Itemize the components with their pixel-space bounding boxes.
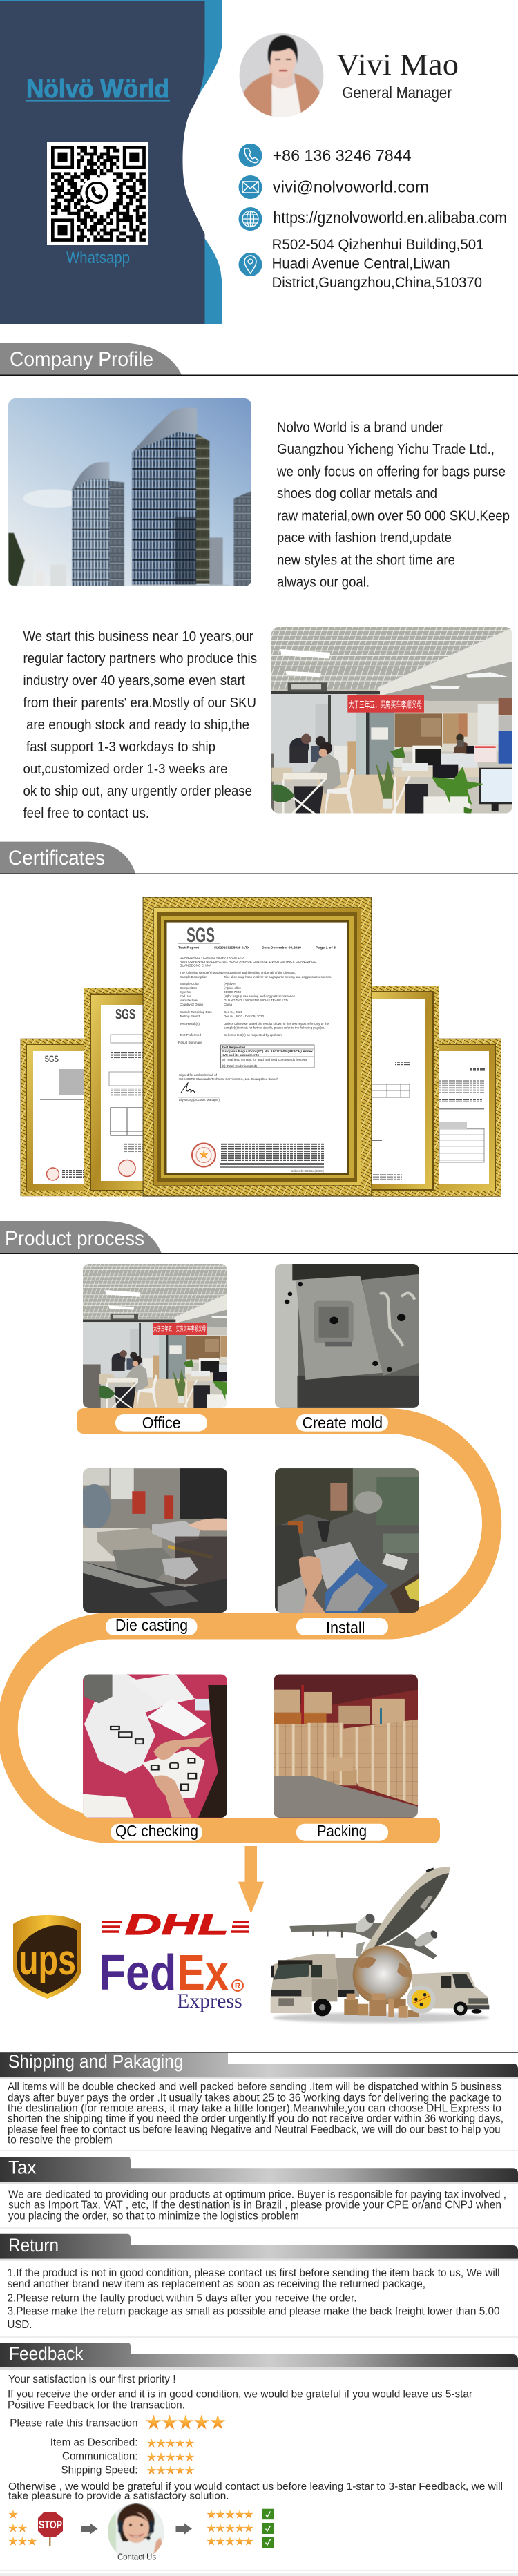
certificate: inner left <box>84 988 156 1196</box>
rating: overall transaction <box>10 2414 225 2430</box>
rating: shipping speed <box>61 2465 194 2477</box>
parcels <box>344 1994 419 2018</box>
body text <box>8 2189 506 2222</box>
plane <box>289 1867 450 1959</box>
rating: item as described <box>50 2437 194 2449</box>
feedback intro text: If you receive the order and it is in good condition, we would be grateful if you would leave us 5-star <box>8 2389 472 2401</box>
certificate: center SGS test report: Country of Origin <box>180 1003 203 1006</box>
contact row: email <box>239 175 429 199</box>
certificate: center SGS test report: Signed for and on behalf of <box>179 1073 218 1077</box>
certificate: center SGS test report: Dec 04, 2020 - Dec 09, 2020 <box>224 1015 264 1018</box>
five-star result rows <box>207 2510 253 2546</box>
van <box>411 1972 489 2015</box>
certificate: center SGS test report: Dec 04, 2020 <box>224 1010 242 1014</box>
icon: stop sign: STOP <box>39 2519 62 2531</box>
certificate: center SGS test report: Style No. <box>180 990 191 994</box>
text block: business history: are enough stock and ready to ship,the <box>26 718 249 733</box>
body text: shorten the shipping time if you need the order urgently.If you do not receive order within 36 working days, <box>8 2113 503 2125</box>
text block: business history: feel free to contact us. <box>23 806 149 821</box>
certificate: center SGS test report: European Regulation (EC) No. 1907/2006 (REACH) Annex <box>222 1050 313 1053</box>
feedback request text <box>8 2481 503 2501</box>
certificate: center SGS test report: GUANGZHOU YICHENG YICHU TRADE LTD. <box>180 956 244 959</box>
text block: company intro: pace with fashion trend,update <box>277 530 452 546</box>
text block: company intro: always our goal. <box>277 575 370 590</box>
truck <box>271 1954 359 2016</box>
label: Office: Office <box>142 1414 181 1432</box>
certificate: center SGS test report: 00090-7003 <box>224 990 241 994</box>
certificate: center SGS test report: Composition <box>180 986 197 990</box>
body text: to resolve the problem <box>8 2134 113 2146</box>
heading bar <box>0 2343 518 2370</box>
QR code: Whatsapp <box>47 142 148 245</box>
logo: Nolvo World: Nölvö Wörld <box>26 75 169 103</box>
label: Install <box>296 1618 388 1637</box>
photo: warehouse <box>274 1673 418 1818</box>
text block: business history: out,customized order 1-3 weeks are <box>23 762 228 777</box>
contact row: address <box>239 237 484 291</box>
certificate: center SGS test report: GUANGDONG CHINA <box>180 964 212 967</box>
heading bar <box>0 2234 518 2261</box>
photo: die casting <box>77 1468 227 1613</box>
photo: QC checking <box>83 1673 227 1818</box>
certificate: far left: SGS <box>45 1053 59 1064</box>
certificate: inner right <box>359 986 439 1196</box>
rating: overall transaction: Please rate this transaction <box>10 2418 137 2430</box>
certificate: center SGS test report <box>143 897 372 1197</box>
contact row: address: Huadi Avenue Central,Liwan <box>272 256 450 272</box>
icon: envelope <box>239 175 262 199</box>
body text: you placing the order, so that to minimize the logistics problem <box>8 2210 299 2222</box>
photo: office towers <box>7 397 253 588</box>
portrait photo: Vivi Mao <box>238 32 325 119</box>
certificate: center SGS test report: Unless otherwise stated the results shown in this test report refer only to the <box>224 1022 329 1026</box>
step 1: Office <box>83 1264 227 1432</box>
logo: FedEx Express: Ex <box>177 1945 229 2001</box>
body text: We are dedicated to providing our products at optimum price. Buyer is responsible for paying tax involved , <box>8 2189 506 2200</box>
certificate: far right <box>373 1039 501 1197</box>
logo: FedEx Express: Fed <box>99 1945 177 2001</box>
feedback intro text <box>8 2374 472 2412</box>
certificate: center SGS test report: SGS <box>186 924 215 947</box>
certificate: center SGS test report: GUANGZHOU YICHENG YICHU TRADE LTD. <box>224 999 289 1002</box>
certificate: center SGS test report: Zinc alloy snap hook in silver for bags purse sewing and dog pets accessories. <box>224 975 332 979</box>
label: Die casting: Die casting <box>115 1616 188 1634</box>
label: QC checking: QC checking <box>115 1822 198 1840</box>
heading bar <box>0 2157 518 2184</box>
arrow: process to shipping <box>238 1846 264 1914</box>
certificate: center SGS test report: (A)for bags purse sewing and dog pets accessories <box>224 994 296 998</box>
section: Return <box>0 2228 518 2331</box>
photo: office interior: 大于三年五，买房买车孝顺父母 <box>349 699 422 710</box>
stopwatch <box>407 1985 436 2014</box>
body text: 1.If the product is not in good condition, please contact us first before sending the item back to us, We will <box>7 2267 500 2279</box>
photo: customer service agent <box>108 2503 164 2562</box>
logo: DHL: DHL <box>125 1908 229 1941</box>
label: Install: Install <box>326 1619 365 1637</box>
label: Packing: Packing <box>317 1822 367 1840</box>
certificate: center SGS test report: R504 QIZHENHUI BUILDING, 501 HUADI AVENUE CENTRAL, LIWAN DISTRICT, GUANGZHOU, <box>180 960 317 963</box>
certificate: center SGS test report: Member of the SGS Group (SGS SA) <box>291 1169 324 1173</box>
heading: Product process: Product process <box>5 1227 144 1250</box>
heading bar: Shipping and Pakaging <box>8 2051 184 2072</box>
icon: location pin <box>239 253 262 276</box>
text block: business history: We start this business near 10 years,our <box>23 629 253 644</box>
certificate: center SGS test report: (A)zinc alloy <box>224 986 242 990</box>
text block: business history <box>23 629 257 821</box>
photo: mold <box>275 1264 419 1408</box>
text block: company intro: we only focus on offering for bags purse <box>276 464 506 479</box>
text block: company intro: Nolvo World is a brand under <box>277 420 443 435</box>
logo: FedEx Express: Express <box>177 1990 242 2012</box>
Whatsapp label: Whatsapp <box>66 249 130 267</box>
logo: UPS <box>13 1915 81 1999</box>
icon: phone <box>239 144 262 167</box>
certificate: center SGS test report: XVII and its amendments <box>222 1053 259 1057</box>
body text: please feel free to contact us before leaving Negative and Neutral Feedback, we will do our best to help you <box>8 2124 501 2135</box>
contact row: phone <box>239 144 412 167</box>
certificate: center SGS test report: Sample Color <box>180 982 199 986</box>
heading: Product process <box>0 1221 518 1254</box>
certificate: center SGS test report: Selected test(s) as requested by applicant <box>224 1033 283 1037</box>
label: Packing <box>296 1822 388 1841</box>
rating: communication <box>62 2451 194 2463</box>
section: Feedback <box>0 2337 518 2562</box>
certificate: center SGS test report: a) Total lead content for lead and lead compounds (except <box>222 1058 307 1061</box>
certificate: center SGS test report: Sample Description <box>180 975 207 979</box>
body text: 3.Please make the return package as small as possible and please make the back freight lower than 5.00 <box>7 2306 500 2318</box>
icon: green check boxes <box>262 2509 274 2548</box>
body text: send another brand new item as replacement as soon as receiving the returned package, <box>7 2278 425 2290</box>
globe <box>353 1945 412 2005</box>
feedback intro text: Your satisfaction is our first priority ! <box>8 2374 175 2385</box>
low star ratings <box>8 2510 37 2546</box>
card dark navy panel <box>0 1 204 324</box>
text block: business history: fast support 1-3 workdays to ship <box>26 740 215 755</box>
photo: office interior <box>271 627 512 814</box>
arrow: to five stars <box>175 2523 192 2535</box>
certificate: center SGS test report: Test Report <box>178 946 200 949</box>
section: Shipping and Pakaging <box>0 2051 518 2146</box>
text block: company intro: Guangzhou Yicheng Yichu Trade Ltd., <box>277 442 495 457</box>
contact row: address: R502-504 Qizhenhui Building,501 <box>272 237 484 253</box>
certificate: center SGS test report: China <box>224 1003 232 1006</box>
heading: Company Profile: Company Profile <box>10 348 153 371</box>
body text: USD. <box>7 2319 32 2331</box>
text block: business history: regular factory partners who produce this <box>23 651 257 666</box>
name: Vivi Mao: Vivi Mao <box>336 48 459 81</box>
certificate: center SGS test report: Test Requested <box>222 1046 245 1049</box>
certificate: inner left: SGS <box>115 1007 135 1023</box>
body text: the destination (for remote areas, it may take a little longer).Meanwhile,you can choose DHL Express to <box>8 2102 501 2114</box>
step 3: Die casting <box>77 1468 227 1635</box>
certificate: center SGS test report: b) Total Cadmium(Cd) <box>222 1064 258 1068</box>
heading: Company Profile <box>0 343 518 376</box>
icon: globe <box>239 207 262 231</box>
section: Tax <box>0 2151 518 2222</box>
job title: General Manager <box>343 84 452 102</box>
text block: business history: ok to ship out, any urgently order please <box>23 784 252 799</box>
card blue wave background <box>0 0 222 324</box>
heading: Certificates: Certificates <box>8 847 105 869</box>
certificate: center SGS test report: Date:December 09,2020 <box>262 946 301 949</box>
certificate: center SGS test report: Page 1 of 3 <box>316 946 336 949</box>
body text: 2.Please return the faulty product within 5 days after you receive the order. <box>7 2292 356 2304</box>
logo: UPS: ups <box>19 1936 76 1984</box>
certificate wall <box>21 897 501 1197</box>
certificate: center SGS test report: SGS-CSTC Standards Technical Services Co., Ltd. Guangzhou Branch <box>179 1077 278 1081</box>
photo: office <box>83 1264 227 1408</box>
certificate: center SGS test report: Lily Wong (Account Manager) <box>179 1098 220 1102</box>
logo: FedEx Express: R <box>235 1982 240 1990</box>
certificate: center SGS test report: Sample Receiving Date <box>180 1010 212 1014</box>
rating: shipping speed: Shipping Speed: <box>61 2465 138 2477</box>
photo: office: 大于三年五，买房买车孝顺父母 <box>153 1325 206 1332</box>
text block: company intro <box>276 420 510 590</box>
body text: days after buyer pays the order .It usually takes about 25 to 36 working days for delivering the package to <box>8 2092 501 2104</box>
certificate: center SGS test report: SL9201931D8928 01TX <box>214 946 250 949</box>
certificate: center SGS test report: Testing Period <box>180 1015 200 1018</box>
heading bar: Feedback <box>9 2343 84 2364</box>
text block: company intro: new styles at the short time are <box>277 553 455 568</box>
text block: business history: from their parents' era.Mostly of our SKU <box>23 695 256 711</box>
certificate: center SGS test report: (A)silver <box>224 982 236 986</box>
panel: business card <box>0 0 222 324</box>
feedback intro text: Positive Feedback for the transaction. <box>8 2400 185 2412</box>
photo: drilling <box>275 1468 419 1613</box>
text block: business history: industry over 40 years,some even start <box>23 673 245 689</box>
heading: Certificates <box>0 842 518 874</box>
certificate: center SGS test report: Test Performed <box>180 1033 201 1037</box>
heading bar <box>0 2051 518 2079</box>
illustration: plane, truck, globe, van <box>271 1867 489 2023</box>
icon: stop sign <box>38 2512 63 2546</box>
label: Office <box>115 1414 207 1432</box>
logo: DHL <box>102 1908 249 1941</box>
rating: item as described: Item as Described: <box>50 2437 138 2449</box>
step 5: QC checking <box>83 1673 227 1841</box>
body text <box>7 2267 500 2331</box>
contact row: email: vivi@nolvoworld.com <box>273 178 429 196</box>
feedback request text: Otherwise , we would be grateful if you would contact us before leaving 1-star to 3-star Feedback, we will <box>8 2481 503 2492</box>
step 2: Create mold <box>275 1264 419 1432</box>
certificate: center SGS test report: End Use <box>180 994 191 998</box>
rating: communication: Communication: <box>62 2451 138 2463</box>
body text <box>8 2082 503 2146</box>
certificate: center SGS test report: Result Summary <box>178 1041 202 1044</box>
body text: All items will be double checked and well packed before sending .Item will be dispatched within 5 business <box>8 2082 501 2093</box>
certificate: center SGS test report: sample(s) tested; for further details, please refer to the following page(s). <box>224 1026 325 1029</box>
heading bar: Return <box>8 2235 59 2256</box>
certificate: center SGS test report: Manufacturer <box>180 999 198 1002</box>
certificate: far left <box>21 1039 148 1196</box>
text block: company intro: shoes dog collar metals and <box>277 486 437 501</box>
feedback request text: take pleasure to provide a satisfactory solution. <box>8 2490 229 2501</box>
contact row: website <box>239 207 507 231</box>
contact row: address: District,Guangzhou,China,510370 <box>272 275 482 291</box>
process flow band <box>0 1408 501 1843</box>
label: Create mold: Create mold <box>303 1414 383 1432</box>
photo: customer service agent: Contact Us <box>117 2553 156 2562</box>
certificate: center SGS test report: The following sample(s) was/were submitted and identified on behalf of the client as: <box>180 971 296 974</box>
contact row: phone: +86 136 3246 7844 <box>273 146 412 164</box>
body text: such as Import Tax, VAT , etc, If the destination is in Brazil , please provide your CPE or/and CNPJ when <box>8 2200 501 2211</box>
logo: FedEx Express <box>99 1945 243 2012</box>
step 6: Packing <box>274 1673 418 1841</box>
heading bar: Tax <box>8 2157 37 2178</box>
arrow: to contact <box>81 2523 98 2535</box>
step 4: Install <box>275 1468 419 1637</box>
certificate: center SGS test report: Test Result(s) <box>180 1022 200 1026</box>
